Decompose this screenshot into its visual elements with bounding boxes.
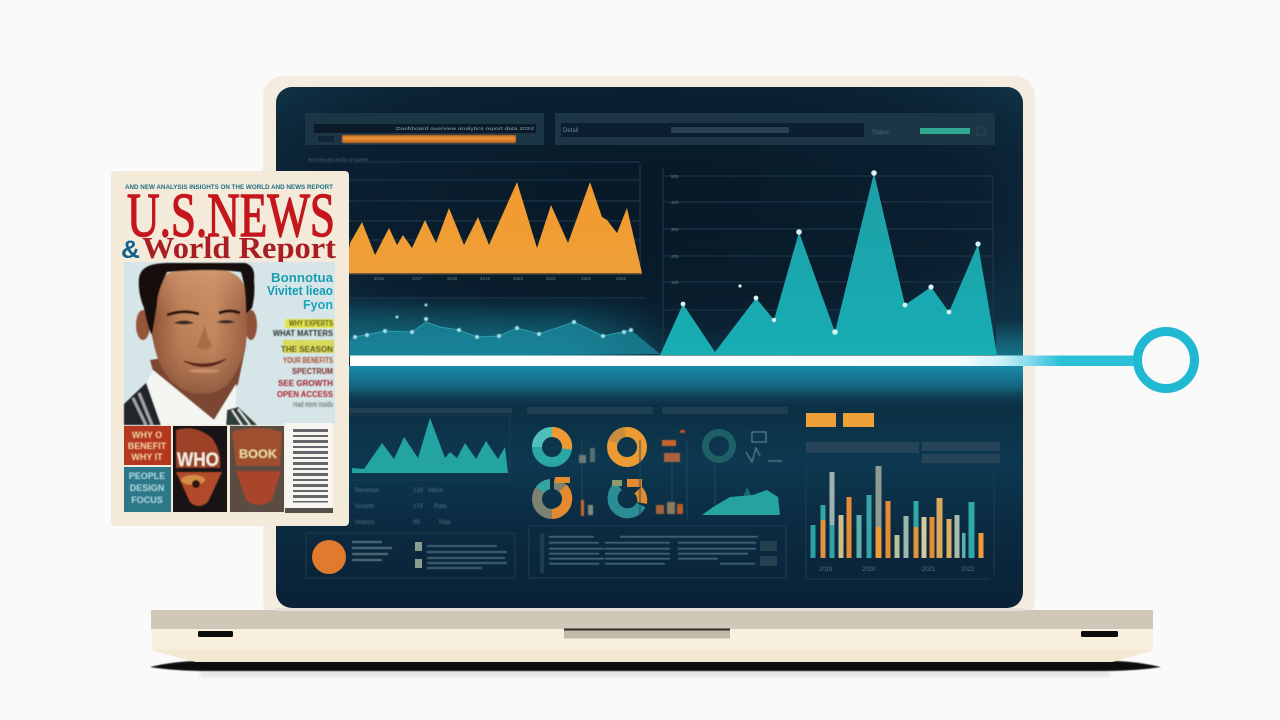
- bar chart header fields: [806, 442, 1000, 463]
- nose: [196, 325, 212, 349]
- donut chart 2: [612, 432, 642, 462]
- lower left area chart panel: [348, 408, 512, 480]
- magazine bottom tiles: [124, 426, 284, 512]
- orange chart axis labels: 2019: [480, 276, 491, 281]
- magazine cover list: WHAT MATTERS: [273, 329, 334, 338]
- lower left metric rows: Value: [428, 488, 444, 494]
- orange chart axis labels: 2016: [374, 276, 385, 281]
- face shading: [152, 268, 247, 394]
- orange area chart: [345, 182, 642, 273]
- magazine cover list: SEE GROWTH: [278, 379, 333, 388]
- lower left summary panel: [306, 533, 515, 578]
- bar chart: [806, 465, 994, 579]
- teal chart grid: [663, 168, 993, 354]
- donut chart 4: [537, 478, 570, 514]
- hair: [139, 263, 254, 335]
- magazine barcode: [285, 423, 333, 513]
- small teal area chart: [702, 487, 780, 515]
- orange chart axis labels: 2023: [616, 276, 627, 281]
- magazine cover list: YOUR BENEFITS: [283, 356, 334, 365]
- small teal line chart: [350, 304, 660, 356]
- laptop base: [151, 608, 1153, 662]
- magazine cover headline: Bonnotua: [271, 270, 334, 285]
- lower left metric rows: Visitors: [355, 520, 375, 526]
- orange legend buttons: [806, 413, 874, 427]
- lower left metric rows: 128: [413, 488, 424, 494]
- teal chart axis labels: [671, 174, 679, 285]
- glow below beam: [349, 366, 1023, 402]
- magazine cover headline: [267, 270, 334, 312]
- glow above beam: [340, 295, 1024, 356]
- top right status panel: Status: [872, 130, 889, 136]
- right port: [1081, 631, 1118, 637]
- teal chart axis labels: 100: [671, 280, 679, 285]
- text table panel: [529, 526, 786, 578]
- magazine cover list: WHY EXPERTS: [289, 319, 333, 328]
- top right status panel: [555, 113, 995, 145]
- magazine masthead: U.S.NEWS: [127, 182, 335, 250]
- laptop base shadow: [150, 661, 1161, 677]
- lower left metric rows: 174: [413, 504, 424, 510]
- magazine cover list: SPECTRUM: [292, 367, 333, 376]
- magazine bottom tiles: PEOPLE: [129, 471, 165, 481]
- top right status panel: Detail: [563, 128, 578, 134]
- teal chart axis labels: 300: [671, 227, 679, 232]
- teal area chart: [660, 170, 997, 355]
- shirt collar: [147, 370, 236, 425]
- green progress bar: [920, 128, 970, 134]
- face: [152, 268, 247, 394]
- top left status panel: Dashboard overview analytics report data 2024: [396, 126, 535, 131]
- magazine bottom tiles: WHY IT: [131, 452, 163, 462]
- magazine cover: [111, 171, 349, 526]
- orange chart axis labels: 2018: [447, 276, 458, 281]
- top left status panel: [305, 113, 544, 145]
- left port: [198, 631, 233, 637]
- eyes: [174, 320, 235, 324]
- donut chart 1: [537, 432, 567, 462]
- donut panel headers: [527, 407, 788, 414]
- magazine bottom tiles: DESIGN: [130, 483, 164, 493]
- magazine cover headline: Fyon: [303, 297, 333, 312]
- magazine bottom tiles: BENEFIT: [128, 441, 167, 451]
- magazine cover list: [273, 319, 334, 409]
- orange chart axis labels: 2020: [513, 276, 524, 281]
- orange progress bar: [342, 135, 516, 143]
- magazine bottom tiles: WHY O: [132, 430, 162, 440]
- ears: [136, 310, 150, 340]
- orange chart axis labels: 2017: [412, 276, 423, 281]
- infographic: laptop dashboard with magazine: [111, 76, 1199, 678]
- orange chart axis labels: 2022: [581, 276, 592, 281]
- lower left metric rows: Rate: [434, 504, 447, 510]
- magazine bottom tiles: WHO: [177, 450, 219, 471]
- smile: [184, 359, 226, 367]
- magazine subtitle: World Report: [142, 230, 337, 265]
- teal chart axis labels: 500: [671, 174, 679, 179]
- orange area chart grid: [308, 162, 645, 298]
- hinge notch: [564, 628, 730, 638]
- donut chart 5: [612, 483, 642, 513]
- tie: [226, 407, 257, 425]
- lower left metric rows: Revenue: [355, 488, 380, 494]
- neck: [150, 345, 246, 420]
- donut chart 3: [706, 432, 732, 460]
- orange chart axis labels: 2021: [546, 276, 557, 281]
- laptop lid bezel: [263, 76, 1035, 621]
- connector beam: [350, 356, 1140, 366]
- magazine bottom tiles: BOOK: [239, 447, 277, 461]
- magazine ampersand: &: [121, 236, 140, 264]
- bar chart: 2022: [961, 567, 975, 573]
- brows: [167, 311, 240, 315]
- magazine cover list: OPEN ACCESS: [277, 390, 334, 399]
- magazine bottom tiles: FOCUS: [131, 495, 163, 505]
- connector ring: [1138, 332, 1194, 388]
- orange chart axis labels: [349, 273, 642, 280]
- bar chart: 2019: [819, 567, 833, 573]
- teal chart axis labels: 400: [671, 200, 679, 205]
- chart caption: Revenue and traffic by quarter: [308, 157, 369, 162]
- bar chart: 2020: [862, 567, 876, 573]
- lower left metric rows: Total: [438, 520, 451, 526]
- magazine cover list: THE SEASON: [281, 345, 333, 354]
- orange circle badge: [312, 540, 346, 574]
- lower left metric rows: [355, 488, 451, 526]
- lower left metric rows: 95: [413, 520, 420, 526]
- magazine cover headline: Vivitet lieao: [267, 283, 333, 298]
- laptop screen: [276, 87, 1024, 608]
- magazine top strip text: AND NEW ANALYSIS INSIGHTS ON THE WORLD AND NEWS REPORT: [125, 184, 333, 191]
- lower left metric rows: Growth: [355, 504, 374, 510]
- teal chart axis labels: 200: [671, 254, 679, 259]
- magazine cover list: read more inside: [293, 400, 333, 409]
- small analytics marks: [579, 430, 782, 520]
- jacket: [124, 383, 161, 425]
- bar chart: 2021: [922, 567, 936, 573]
- magazine photo: smiling man: [124, 262, 335, 425]
